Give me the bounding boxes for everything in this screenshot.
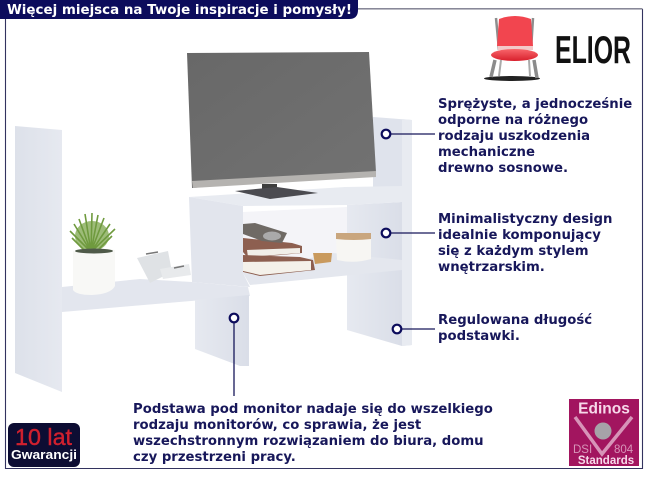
badge: Edinos standards: DSI: [573, 444, 592, 456]
icon: red chair: [484, 16, 540, 81]
badge: 10 years warranty: 10 lat: [15, 424, 73, 450]
text: elastic wood: rodzaju uszkodzenia: [438, 129, 590, 144]
centre box front: [189, 197, 250, 287]
text: minimalist design: [438, 212, 612, 275]
lower shelf: [62, 279, 250, 312]
upper shelf top: [189, 186, 402, 206]
callout: middle marker and line: [382, 229, 435, 237]
plant in white pot: [70, 213, 115, 295]
text: minimalist design: się z każdym stylem: [438, 244, 589, 259]
text: minimalist design: Minimalistyczny design: [438, 212, 612, 227]
text: description: [133, 402, 493, 465]
callout: lower marker and line: [393, 325, 435, 333]
centre leg: [195, 295, 249, 366]
text: elastic wood: odporne na różnego: [438, 112, 588, 128]
books and glasses: [243, 223, 332, 276]
badge: Edinos standards: Edinos: [578, 400, 630, 418]
text: adjustable length: podstawki.: [438, 329, 520, 344]
text: adjustable length: Regulowana długość: [438, 312, 592, 328]
text: description: rodzaju monitorów, co sprawia, że jest: [133, 417, 422, 433]
badge: Edinos standards: Standards: [578, 455, 634, 467]
text: elastic wood: [438, 96, 632, 176]
text: elastic wood: drewno sosnowe.: [438, 161, 568, 176]
monitor: [187, 52, 376, 199]
right rear leg: [347, 202, 402, 346]
left side panel: [15, 126, 62, 392]
text: adjustable length: [438, 312, 592, 344]
text: elastic wood: Sprężyste, a jednocześnie: [438, 96, 632, 112]
text: description: czy przestrzeni pracy.: [133, 450, 296, 465]
badge: 10 years warranty: [8, 423, 80, 467]
badge: Edinos standards: 804: [614, 444, 634, 456]
right rear panel: [373, 117, 412, 346]
product: white monitor stand: [15, 52, 412, 392]
badge: Edinos standards: [569, 399, 639, 467]
middle shelf: [243, 253, 402, 285]
badge: 10 years warranty: Gwarancji: [11, 447, 77, 462]
text: elastic wood: mechaniczne: [438, 145, 535, 160]
title banner: Więcej miejsca na Twoje inspiracje i pomysły!: [7, 2, 352, 18]
logo: Elior chair and wordmark: [484, 16, 631, 81]
text: minimalist design: wnętrzarskim.: [438, 260, 545, 275]
text: description: wszechstronnym rozwiązaniem do biura, domu: [133, 434, 484, 449]
callout: top marker and line: [382, 130, 435, 138]
text: minimalist design: idealnie komponujący: [438, 228, 601, 243]
back opening: [243, 207, 347, 274]
callout: base marker and line: [230, 314, 238, 396]
cards on shelf: [137, 251, 191, 283]
jar with cork lid: [336, 233, 371, 262]
text: description: Podstawa pod monitor nadaje się do wszelkiego: [133, 402, 493, 417]
